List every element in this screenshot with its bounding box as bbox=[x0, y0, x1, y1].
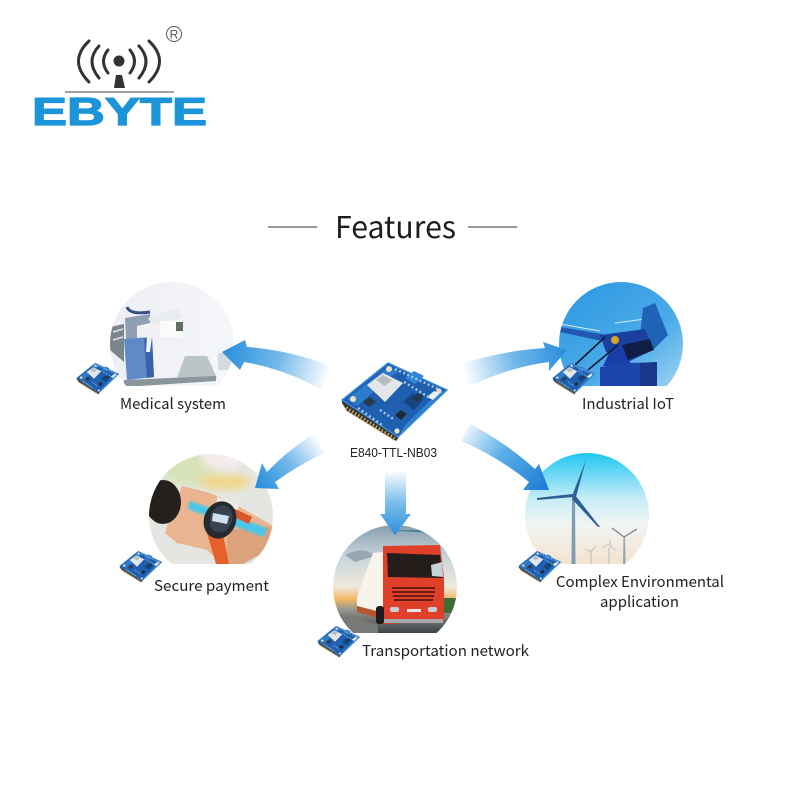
photo: wind turbines bbox=[525, 453, 649, 564]
label: Complex Environmental bbox=[556, 571, 724, 592]
module board bbox=[342, 363, 447, 441]
icon: module bbox=[553, 363, 595, 394]
panel: secure payment bbox=[120, 446, 280, 596]
wordmark: EBYTE bbox=[32, 91, 207, 134]
arrow: to transportation network bbox=[380, 470, 411, 535]
heading: Features: Features bbox=[335, 203, 456, 247]
arrow: to industrial IoT bbox=[462, 342, 567, 386]
icon: module bbox=[519, 551, 561, 582]
registered mark bbox=[166, 26, 182, 42]
module name: E840-TTL-NB03 bbox=[350, 446, 437, 460]
label: Secure payment bbox=[154, 575, 269, 596]
label: application bbox=[600, 591, 679, 612]
photo: smartwatch bbox=[149, 454, 273, 564]
icon: module bbox=[77, 363, 119, 394]
logo: EBYTE bbox=[32, 26, 207, 134]
label: Medical system bbox=[120, 393, 226, 414]
registered mark: R bbox=[170, 28, 179, 42]
label: Industrial IoT bbox=[582, 393, 674, 414]
label bbox=[556, 571, 724, 612]
icon: module bbox=[318, 626, 360, 657]
panel: complex environmental application bbox=[519, 450, 724, 612]
arrow: to complex environmental application bbox=[461, 424, 549, 490]
arrow: to medical system bbox=[222, 340, 330, 390]
icon: module bbox=[120, 551, 162, 582]
central module: E840-TTL-NB03 bbox=[342, 363, 447, 460]
panel: industrial IoT bbox=[553, 280, 690, 414]
infographic canvas bbox=[34, 26, 724, 660]
photo: red truck bbox=[330, 522, 460, 633]
label: Transportation network bbox=[362, 640, 530, 661]
panel: medical system bbox=[77, 280, 240, 414]
arrow: to secure payment bbox=[255, 433, 324, 489]
photo: crane bbox=[555, 280, 690, 386]
icon: signal antenna bbox=[65, 41, 174, 92]
photo: medical robot bbox=[110, 282, 234, 386]
panel: transportation network bbox=[318, 522, 530, 661]
